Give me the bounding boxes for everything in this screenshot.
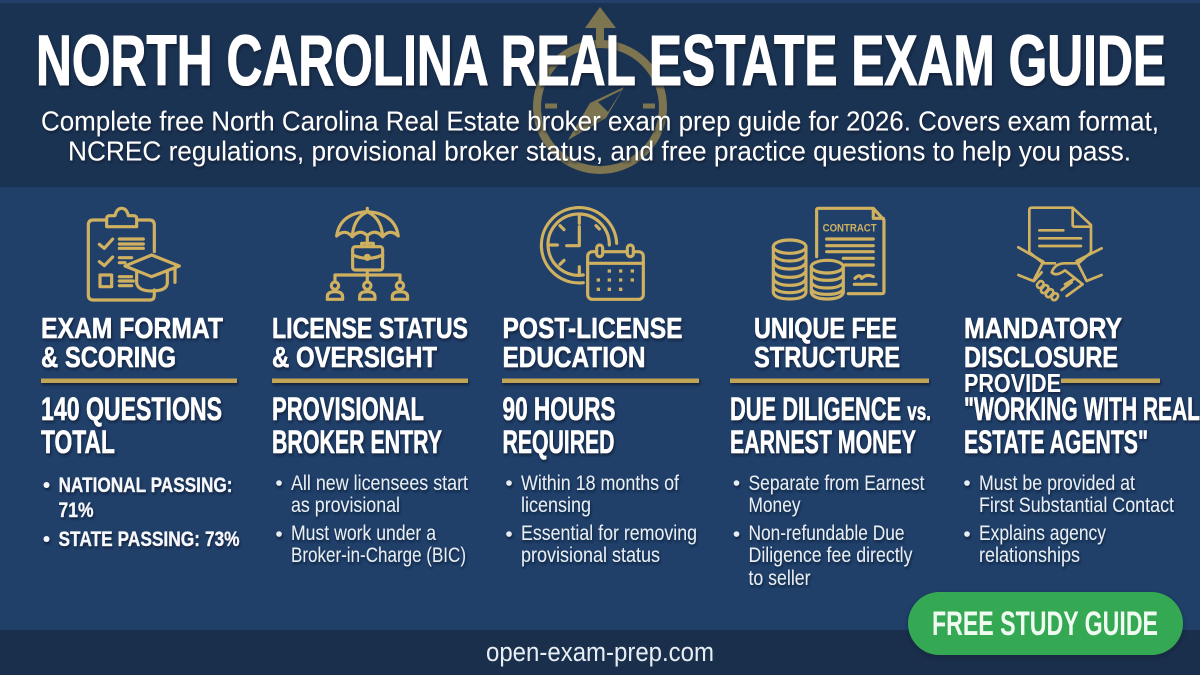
panel: license status and oversight: All new licensees start (291, 471, 468, 495)
panel: mandatory disclosure: MANDATORY (964, 313, 1122, 345)
panel: license status and oversight: & OVERSIGHT (272, 342, 437, 374)
panel: post-license education: EDUCATION (502, 342, 646, 374)
panel: license status and oversight: Broker-in-Charge (BIC) (291, 543, 466, 567)
icon: contract and coin stacks: CONTRACT (823, 223, 877, 235)
panel: footer band (0, 630, 1200, 675)
panel: mandatory disclosure: relationships (979, 543, 1080, 567)
icon: clock and calendar (541, 208, 643, 299)
subtitle (41, 106, 1159, 166)
panel: post-license education: licensing (521, 493, 591, 517)
panel: unique fee structure: Diligence fee directly (748, 543, 913, 567)
panel: post-license education: 90 HOURS (502, 391, 616, 427)
panel: exam format and scoring (41, 313, 240, 551)
panel: unique fee structure: STRUCTURE (754, 342, 900, 374)
panel: header band (0, 0, 1200, 187)
panel: exam format and scoring: & SCORING (41, 342, 176, 374)
panel: unique fee structure: DUE DILIGENCE vs. (730, 391, 931, 427)
panel: license status and oversight: Must work under a (291, 521, 436, 545)
panel: mandatory disclosure: DISCLOSURE (964, 342, 1118, 374)
panel: post-license education: REQUIRED (502, 424, 614, 460)
panel: license status and oversight: PROVISIONAL (272, 391, 424, 427)
panel: post-license education: provisional status (521, 543, 660, 567)
panel: post-license education: Within 18 months of (521, 471, 679, 495)
panel: license status and oversight: as provisional (291, 493, 400, 517)
panel: exam format and scoring: EXAM FORMAT (41, 313, 223, 345)
icon: umbrella, briefcase and team (327, 208, 408, 299)
panel: mandatory disclosure: Explains agency (979, 521, 1106, 545)
panel: post-license education (502, 313, 699, 567)
panel: post-license education: Essential for removing (521, 521, 697, 545)
panel: exam format and scoring: STATE PASSING: 73% (58, 528, 240, 551)
icon: document and handshake (1018, 208, 1102, 302)
panel: exam format and scoring: 140 QUESTIONS (41, 391, 222, 427)
panel: license status and oversight: LICENSE STATUS (272, 313, 468, 345)
panel: mandatory disclosure (964, 313, 1200, 567)
panel: unique fee structure: to seller (748, 566, 810, 590)
panel: license status and oversight (272, 313, 468, 567)
button: free study guide (908, 592, 1183, 655)
icon: clipboard with graduation cap (88, 208, 179, 300)
footer url: open-exam-prep.com (486, 637, 714, 667)
panel: post-license education: POST-LICENSE (502, 313, 682, 345)
panel: unique fee structure: Money (748, 493, 801, 517)
panel: unique fee structure: EARNEST MONEY (730, 424, 916, 460)
icon: contract and coin stacks (773, 208, 884, 299)
panel: exam format and scoring: TOTAL (41, 424, 115, 460)
icon: compass watermark (537, 7, 663, 170)
panel: unique fee structure: Non-refundable Due (748, 521, 904, 545)
panel: mandatory disclosure: Must be provided at (979, 471, 1135, 495)
panel: unique fee structure: Separate from Earnest (748, 471, 925, 495)
panel: unique fee structure (730, 313, 931, 590)
panel: mandatory disclosure: PROVIDE (964, 368, 1061, 398)
panel: exam format and scoring: NATIONAL PASSING: (58, 474, 232, 497)
panel: license status and oversight: BROKER ENTRY (272, 424, 442, 460)
panel: unique fee structure: UNIQUE FEE (754, 313, 897, 345)
panel: exam format and scoring: 71% (58, 499, 94, 522)
subtitle: NCREC regulations, provisional broker status, and free practice questions to help you pass. (68, 136, 1131, 166)
